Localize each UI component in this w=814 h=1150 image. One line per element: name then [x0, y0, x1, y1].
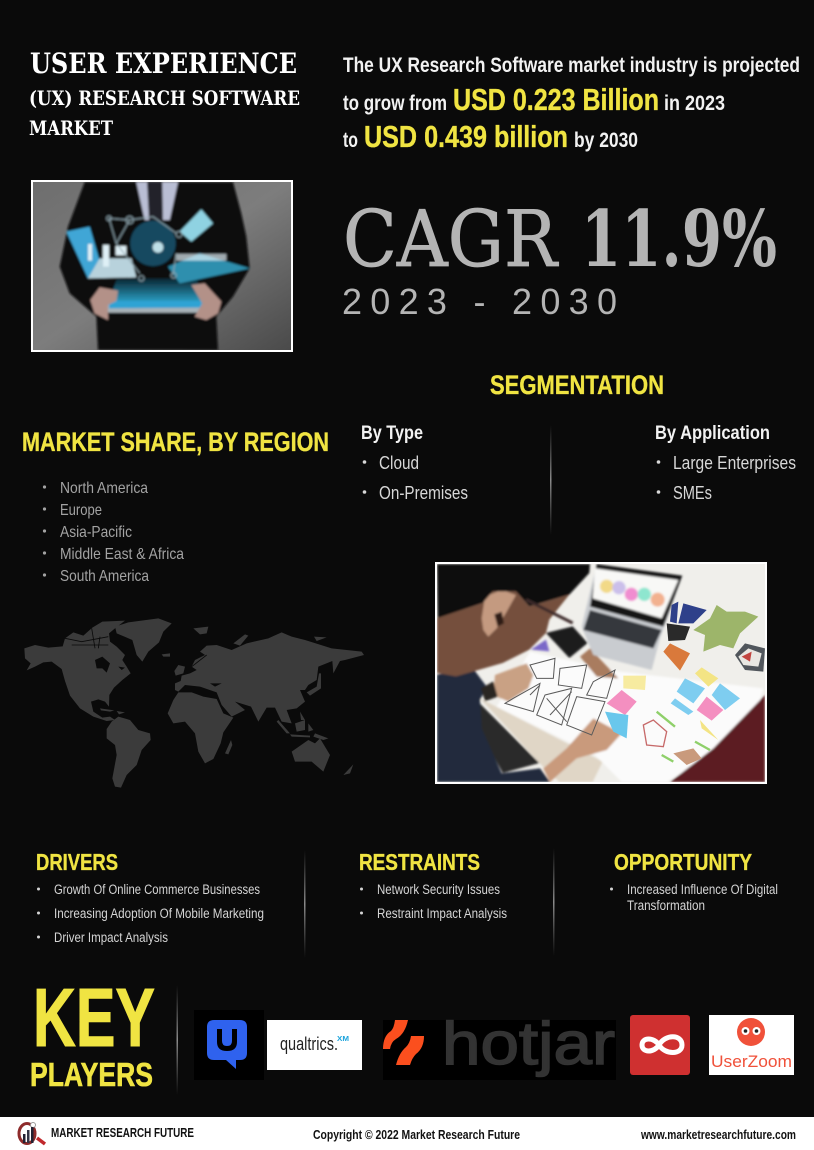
segment: by type: On-Premises [379, 483, 468, 503]
restraints panel: Network Security Issues [377, 882, 500, 897]
market projection text: USD 0.223 Billion [453, 82, 659, 117]
segment: by type: Cloud [379, 453, 419, 473]
region list: Middle East & Africa [60, 546, 184, 563]
opportunity panel [610, 849, 778, 913]
segmentation heading: SEGMENTATION [490, 370, 664, 400]
segment: by application [655, 423, 796, 503]
drivers panel: DRIVERS [36, 849, 118, 875]
segment: by application: SMEs [673, 483, 712, 503]
title: MARKET [29, 116, 113, 140]
CAGR figure: CAGR [343, 195, 559, 285]
key players heading: KEY [33, 971, 155, 1064]
title: USER EXPERIENCE [30, 47, 297, 80]
logo: Qualtrics: XM [337, 1036, 349, 1043]
restraints panel: RESTRAINTS [359, 849, 480, 875]
market projection text: to [343, 129, 358, 152]
footer logo [19, 1122, 45, 1144]
market projection text: by 2030 [574, 129, 638, 152]
key players heading: PLAYERS [30, 1056, 153, 1093]
logo: UserTesting [194, 1010, 264, 1080]
opportunity panel: Increased Influence Of Digital [627, 882, 778, 897]
logo: Optimal Workshop [630, 1015, 690, 1075]
logo: Qualtrics: qualtrics. [280, 1034, 338, 1054]
logo: UserZoom: UserZoom [711, 1052, 792, 1071]
drivers panel: Growth Of Online Commerce Businesses [54, 882, 260, 897]
logo: Qualtrics [267, 1020, 362, 1070]
region list: South America [60, 568, 149, 585]
region list: Asia-Pacific [60, 524, 132, 541]
logo: UserZoom [709, 1015, 794, 1075]
market projection text [343, 54, 800, 154]
market share heading: MARKET SHARE, BY REGION [22, 427, 329, 457]
drivers panel: Driver Impact Analysis [54, 930, 168, 945]
region list: Europe [60, 502, 102, 519]
restraints panel: Restraint Impact Analysis [377, 906, 507, 921]
region list: North America [60, 480, 148, 497]
segment: by application: Large Enterprises [673, 453, 796, 473]
photo: businessman holding tablet with holographic devices [31, 180, 293, 352]
drivers panel [36, 849, 264, 945]
opportunity panel: Transformation [627, 898, 705, 913]
logo: Hotjar [383, 1010, 616, 1080]
logo: Hotjar: hotjar [442, 1010, 615, 1077]
title [29, 47, 300, 140]
key players heading [30, 971, 155, 1093]
restraints panel [359, 849, 507, 921]
market projection text: to grow from [343, 92, 447, 115]
footer bar [0, 1117, 814, 1150]
segment: by application: By Application [655, 423, 770, 444]
CAGR period: 2023 - 2030 [342, 281, 617, 322]
footer bar: MARKET RESEARCH FUTURE [51, 1125, 194, 1140]
region list [43, 480, 184, 585]
photo: UX designers working on wireframes [435, 562, 767, 784]
world map [24, 618, 364, 788]
footer bar: Copyright © 2022 Market Research Future [313, 1127, 520, 1142]
drivers panel: Increasing Adoption Of Mobile Marketing [54, 906, 264, 921]
segment: by type [361, 423, 468, 503]
segment: by type: By Type [361, 423, 423, 444]
title: (UX) RESEARCH SOFTWARE [29, 86, 300, 110]
CAGR figure [343, 194, 777, 285]
market projection text: in 2023 [664, 92, 725, 115]
opportunity panel: OPPORTUNITY [614, 849, 752, 875]
market projection text: USD 0.439 billion [364, 119, 568, 154]
